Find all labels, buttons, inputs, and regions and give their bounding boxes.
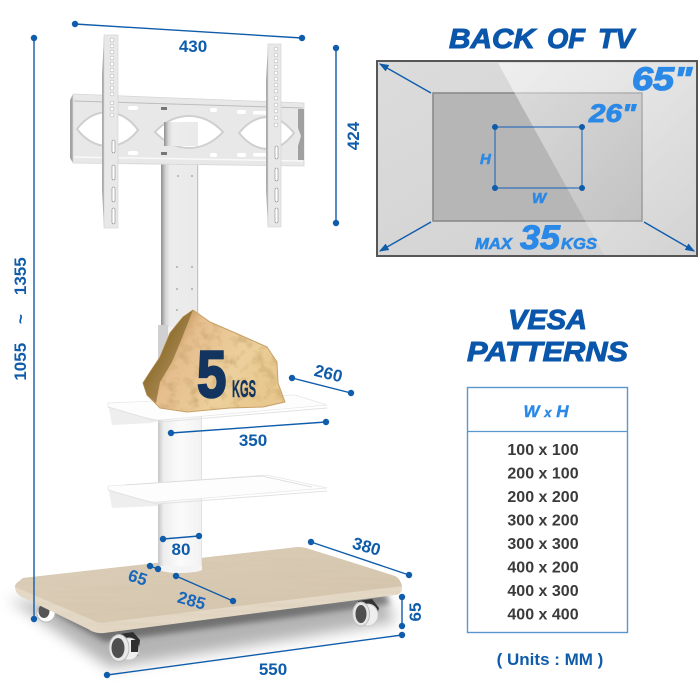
heading: vesa patterns: PATTERNS <box>467 336 628 367</box>
table header: W x H <box>523 402 569 421</box>
units note: ( Units : MM ) <box>497 650 603 669</box>
dimension: base offset 285 <box>173 573 236 614</box>
table: vesa patterns <box>468 388 628 632</box>
5 label: 5 <box>197 337 226 411</box>
upper shelf <box>108 395 327 425</box>
table rows: 400 x 300 <box>507 583 579 600</box>
dimension: 430 width <box>72 21 305 56</box>
right vertical rail <box>266 44 281 227</box>
dimension: column offset 65: 65 <box>126 566 150 590</box>
dimension: 424 height <box>333 45 363 226</box>
back right wheel <box>352 599 379 626</box>
dimension: shelf depth 260 <box>289 361 354 396</box>
rock 5 kgs <box>143 310 285 412</box>
heading: back of tv <box>449 23 636 54</box>
dimension: base width 550 <box>104 632 405 679</box>
dimension: base depth 380: 380 <box>350 534 383 560</box>
dimension: shelf depth 260: 260 <box>312 361 344 386</box>
dimension: base depth 380 <box>308 534 412 578</box>
dimension: base offset 285: 285 <box>175 588 208 614</box>
table rows: 200 x 100 <box>507 466 579 482</box>
dimension: 430 width: 430 <box>179 37 207 56</box>
dimension: base height 65: 65 <box>406 603 425 621</box>
table rows: 400 x 200 <box>507 560 579 576</box>
dimension: column offset 65 <box>126 563 161 590</box>
label 35: 35 <box>520 219 561 257</box>
mount crossbar <box>70 94 304 166</box>
dimension: total height: 1055 ~ 1355 <box>11 257 30 381</box>
lower column <box>158 327 202 573</box>
table rows: 300 x 200 <box>507 512 579 530</box>
corner arrows <box>380 64 694 251</box>
label 26 inch: 26" <box>588 100 637 128</box>
dimension: base height 65 <box>399 594 425 629</box>
back left wheel <box>37 604 55 622</box>
dimension: column width 80: 80 <box>172 540 190 559</box>
label max 35 kgs: MAX <box>475 236 513 253</box>
heading: back of tv: BACK <box>449 23 537 54</box>
wooden base <box>15 547 402 633</box>
table rows: 100 x 100 <box>507 442 579 459</box>
dimension: total height <box>11 35 37 622</box>
dimension: shelf width 350: 350 <box>239 431 267 450</box>
heading: back of tv: TV <box>598 23 636 54</box>
inner 26 inch rectangle <box>433 93 642 221</box>
lower shelf <box>108 475 327 508</box>
label kgs: KGS <box>561 236 597 253</box>
heading: vesa patterns <box>467 304 628 367</box>
dimension: base width 550: 550 <box>259 660 287 679</box>
table rows: 200 x 200 <box>507 489 579 506</box>
heading: back of tv: OF <box>547 23 586 54</box>
table rows: 400 x 400 <box>507 606 579 624</box>
label 65 inch: 65" <box>632 61 693 97</box>
rock 5 kgs: KGS <box>232 376 256 403</box>
label w: W <box>532 190 548 207</box>
vesa hole pattern <box>492 124 585 191</box>
stand illustration <box>8 35 402 668</box>
label h: H <box>480 151 492 168</box>
left vertical rail <box>102 35 118 228</box>
telescoping sleeve <box>158 325 168 380</box>
table rows <box>507 442 579 624</box>
floor shadow <box>8 592 395 668</box>
panel: back of tv diagram <box>377 61 697 256</box>
dimension: column width 80 <box>160 533 202 559</box>
front wheel <box>109 632 140 662</box>
upper column <box>161 160 198 330</box>
heading: vesa patterns: VESA <box>508 304 587 335</box>
dimension: shelf width 350 <box>168 419 329 450</box>
table rows: 300 x 300 <box>507 536 579 553</box>
dimension: 424 height: 424 <box>344 121 363 150</box>
